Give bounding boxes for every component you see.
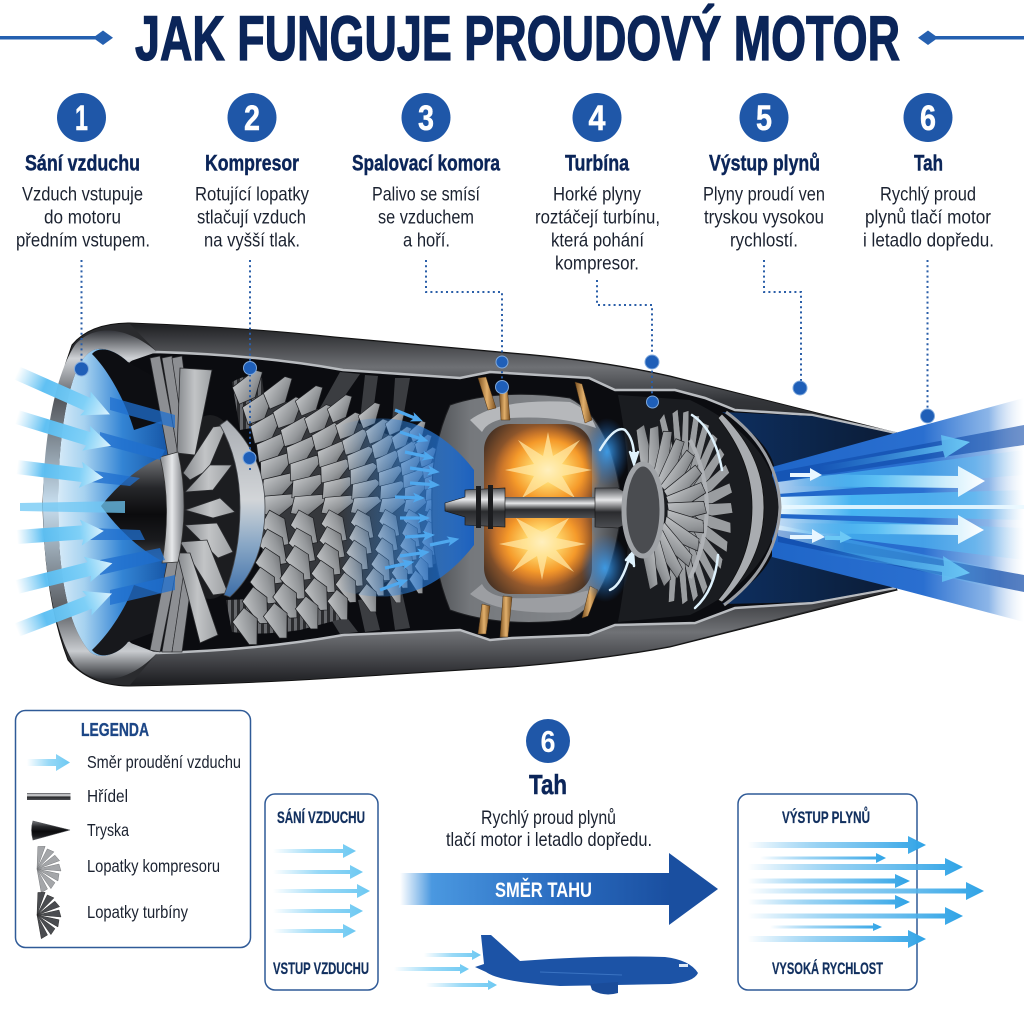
exhaust plume — [772, 398, 1024, 622]
thrust heading: Tah — [529, 769, 567, 800]
step 5: gas exit — [703, 93, 825, 252]
intake dark upper cavity — [92, 349, 165, 430]
step 3 description: se vzduchem — [378, 206, 474, 228]
exhaust panel bottom label: VYSOKÁ RYCHLOST — [772, 959, 883, 978]
exhaust panel arrows — [748, 836, 984, 948]
step 1 description — [16, 184, 150, 252]
step 6 description: plynů tlačí motor — [865, 206, 991, 228]
step 4 description: kompresor. — [555, 252, 639, 274]
step 2 description — [195, 184, 309, 252]
step 4 badge — [572, 93, 622, 142]
step 5 badge — [740, 93, 788, 142]
legend: compressor blades — [32, 845, 220, 893]
nacelle top band — [130, 324, 893, 432]
legend: turbine blades: Lopatky turbíny — [87, 902, 188, 922]
step 5 description: tryskou vysokou — [704, 206, 824, 228]
nozzle cavity bottom — [722, 545, 895, 604]
engine interior — [128, 352, 895, 653]
legend: nozzle: Tryska — [87, 820, 129, 840]
thrust description: Rychlý proud plynů — [481, 807, 616, 829]
step 3 badge — [402, 93, 450, 142]
step 5 badge: 5 — [756, 99, 772, 138]
nacelle bottom band — [130, 589, 893, 685]
step 2 badge: 2 — [244, 99, 260, 138]
turbine swirl arrows — [600, 415, 722, 608]
intake airflow streaks — [20, 397, 175, 605]
step 6: thrust — [863, 93, 994, 252]
compressor hub — [255, 395, 445, 618]
legend: shaft — [27, 786, 128, 806]
intake panel bottom label: VSTUP VZDUCHU — [273, 960, 369, 978]
airplane wake arrows — [394, 950, 497, 990]
combustion chamber housing — [432, 394, 622, 622]
spinner cone — [101, 456, 170, 562]
thrust direction arrow — [400, 853, 718, 925]
connector lines — [82, 260, 928, 470]
fan front ring — [220, 420, 265, 597]
legend: nozzle — [32, 820, 129, 840]
thrust description — [446, 807, 652, 851]
step 4 heading: Turbína — [565, 150, 629, 176]
compressor back fins top — [232, 376, 268, 430]
compressor back fins bottom — [226, 596, 345, 634]
step 6 badge — [904, 93, 952, 142]
support struts — [320, 372, 410, 634]
step 1 description: do motoru — [44, 206, 121, 228]
panel: legend — [16, 710, 250, 948]
step 1: intake — [16, 93, 150, 252]
intake panel top label: SÁNÍ VZDUCHU — [277, 808, 365, 827]
fan hub — [172, 415, 248, 599]
turbine middle ring — [690, 440, 707, 578]
step 5 heading: Výstup plynů — [709, 150, 820, 176]
legend: airflow arrow — [27, 752, 241, 772]
combustion chamber bottom rim — [470, 584, 596, 613]
step 4 description — [535, 184, 660, 274]
step 6 badge: 6 — [920, 99, 936, 138]
turbine rear ring — [718, 414, 764, 602]
step 3: combustion chamber — [352, 93, 500, 252]
thrust description: tlačí motor i letadlo dopředu. — [446, 829, 652, 851]
legend: turbine blades — [32, 891, 188, 939]
exhaust dome rim — [724, 412, 780, 605]
title ornament right — [918, 30, 1024, 45]
step 4 description: roztáčejí turbínu, — [535, 206, 660, 228]
step 2 description: stlačují vzduch — [197, 206, 306, 228]
step 5 description — [703, 184, 825, 252]
step 1 heading: Sání vzduchu — [25, 150, 140, 176]
step 3 description: Palivo se smísí — [372, 184, 480, 206]
combustion chamber interior — [484, 424, 592, 594]
step 5 description: Plyny proudí ven — [703, 184, 825, 206]
panel: exhaust — [738, 794, 984, 990]
combustion chamber top rim — [470, 401, 596, 432]
turbine front blades — [636, 423, 708, 590]
compressor airflow tint — [340, 418, 474, 597]
airplane — [475, 935, 698, 994]
main shaft — [445, 485, 635, 529]
title ornament left — [0, 30, 113, 45]
legend: airflow arrow: Směr proudění vzduchu — [87, 752, 241, 772]
hot gas glow upper — [585, 418, 629, 486]
step 4 description: Horké plyny — [553, 184, 641, 206]
step 2 description: na vyšší tlak. — [204, 230, 300, 252]
step 2 description: Rotující lopatky — [195, 184, 309, 206]
exhaust panel top label: VÝSTUP PLYNŮ — [782, 807, 870, 827]
step 5 description: rychlostí. — [730, 230, 798, 252]
step 1 description: předním vstupem. — [16, 230, 150, 252]
exhaust arrows — [790, 435, 985, 582]
step 2 heading: Kompresor — [205, 150, 299, 176]
flame upper — [494, 424, 602, 516]
step 4 description: která pohání — [551, 230, 644, 252]
flame lower — [488, 496, 596, 588]
intake panel arrows — [273, 844, 370, 938]
step 2 badge — [228, 93, 276, 142]
step 6 heading: Tah — [914, 150, 943, 176]
connector pins — [74, 355, 934, 464]
nacelle outer shell — [43, 323, 897, 686]
spinner base ring — [160, 452, 184, 563]
turbine disc — [624, 464, 662, 556]
fuel nozzles — [478, 377, 598, 637]
step 6 description — [863, 184, 994, 252]
turbine rear blades — [659, 408, 733, 605]
step 6 description: Rychlý proud — [880, 184, 976, 206]
intake dark lower cavity — [92, 585, 165, 655]
step 3 heading: Spalovací komora — [352, 150, 500, 176]
step 4 badge: 4 — [588, 99, 606, 138]
fan blades — [177, 368, 235, 643]
nozzle cavity top — [722, 412, 895, 470]
legend title: LEGENDA — [81, 720, 149, 740]
intake opening — [58, 349, 175, 656]
thrust summary — [394, 719, 718, 994]
step 4: turbine — [535, 93, 660, 274]
legend: compressor blades: Lopatky kompresoru — [87, 856, 220, 876]
jet engine cutaway illustration — [12, 260, 1024, 686]
turbine background — [618, 395, 779, 622]
intake lip — [43, 331, 157, 679]
step 2: compressor — [195, 93, 309, 252]
step 1 description: Vzduch vstupuje — [22, 184, 143, 206]
step 1 badge: 1 — [75, 99, 88, 138]
compressor airflow arrows — [378, 405, 460, 595]
step 3 badge: 3 — [418, 99, 434, 138]
rear fan fins — [150, 356, 194, 652]
step 1 badge — [57, 93, 106, 142]
intake arrows — [12, 361, 117, 642]
thrust badge — [526, 719, 570, 763]
thrust direction label: SMĚR TAHU — [495, 877, 592, 902]
compressor stages — [227, 368, 446, 648]
legend: shaft: Hřídel — [87, 786, 128, 806]
step 6 description: i letadlo dopředu. — [863, 230, 994, 252]
thrust badge: 6 — [540, 724, 556, 759]
step 3 description — [372, 184, 480, 252]
panel: intake — [265, 794, 378, 990]
hot gas glow lower — [581, 534, 629, 602]
step 3 description: a hoří. — [403, 230, 450, 252]
